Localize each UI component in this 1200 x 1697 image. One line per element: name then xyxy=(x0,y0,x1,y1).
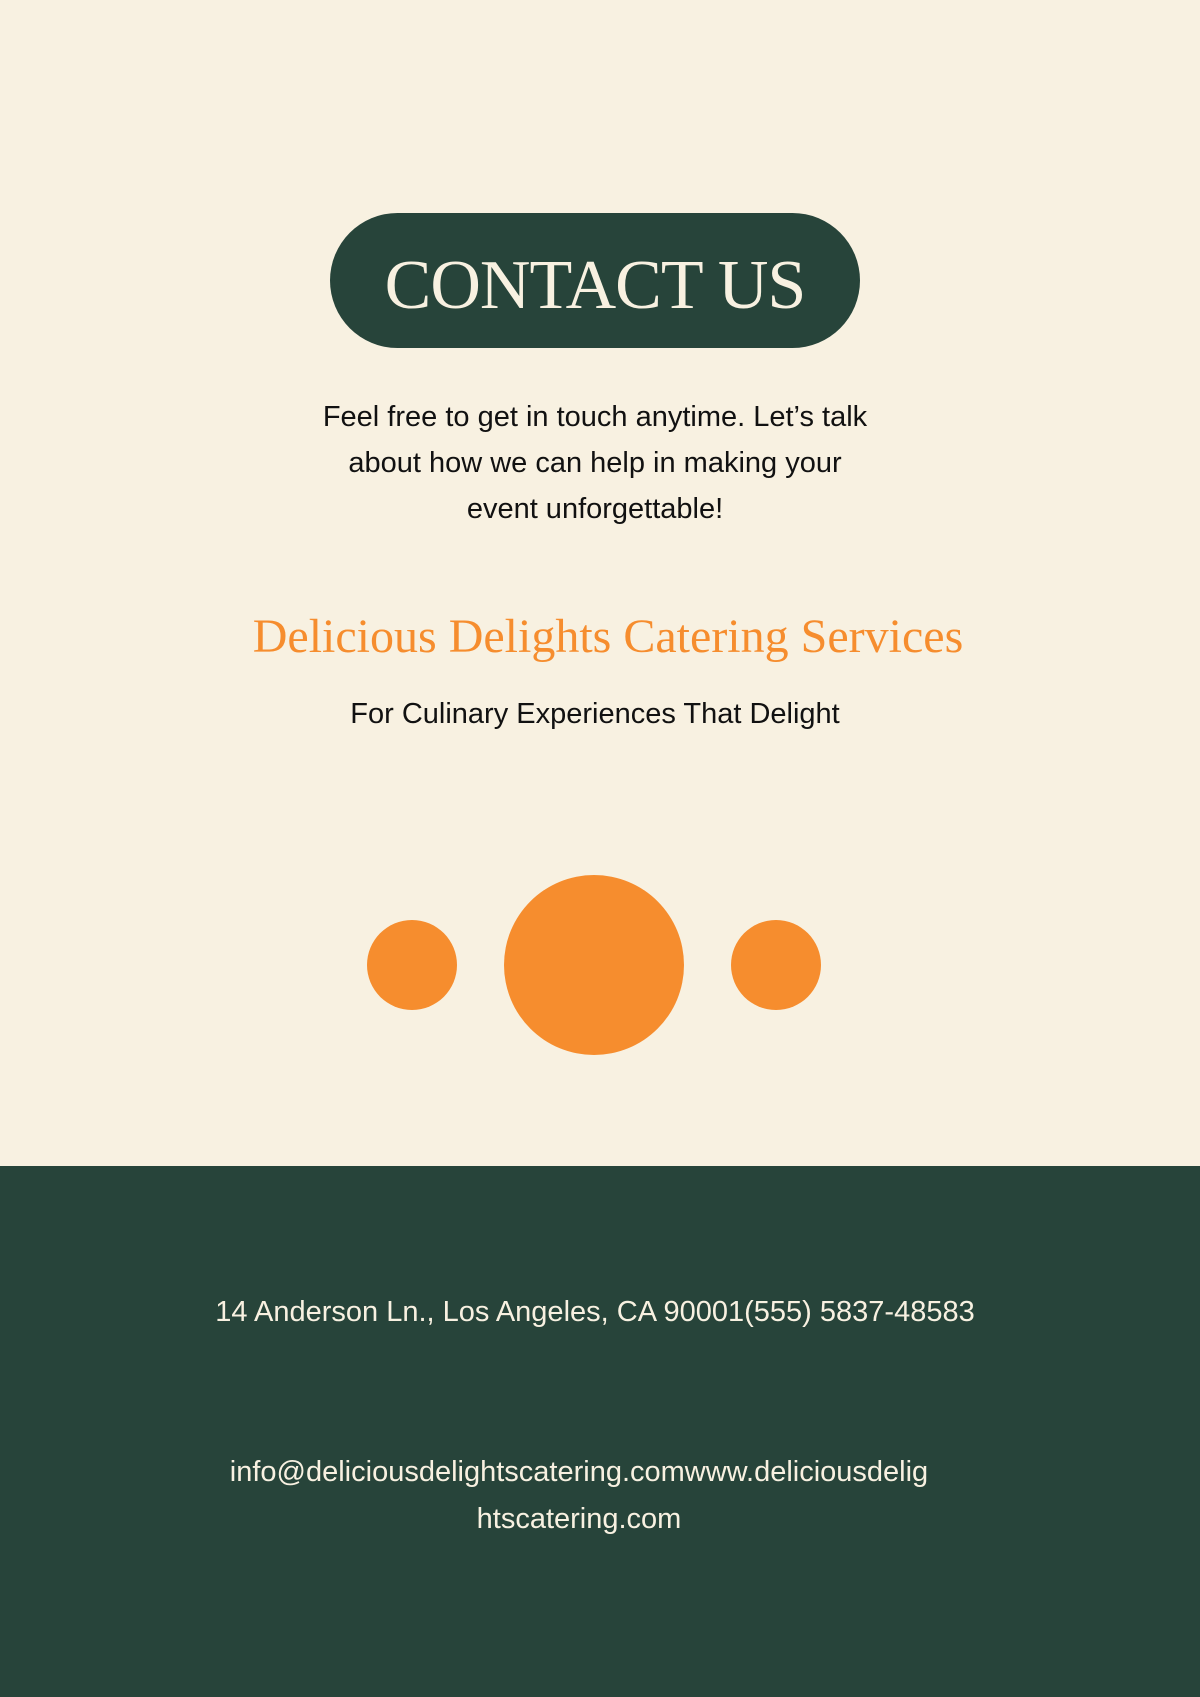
intro text: event unforgettable! xyxy=(467,493,723,525)
address and phone: 14 Anderson Ln., Los Angeles, CA 90001(555) 5837-48583 xyxy=(215,1296,975,1328)
email and website xyxy=(230,1456,928,1535)
intro text xyxy=(323,401,868,525)
tagline: For Culinary Experiences That Delight xyxy=(350,698,840,730)
large center circle xyxy=(504,875,684,1055)
small left circle xyxy=(367,920,457,1010)
footer band xyxy=(0,1166,1200,1697)
brand name heading: Delicious Delights Catering Services xyxy=(253,610,963,663)
intro text: about how we can help in making your xyxy=(348,447,842,479)
title pill: CONTACT US: CONTACT US xyxy=(385,247,805,324)
title pill: CONTACT US xyxy=(330,213,860,348)
small right circle xyxy=(731,920,821,1010)
decorative circles xyxy=(367,875,821,1055)
intro text: Feel free to get in touch anytime. Let’s talk xyxy=(323,401,867,433)
email and website: info@deliciousdelightscatering.comwww.deliciousdelig xyxy=(230,1456,928,1488)
email and website: htscatering.com xyxy=(477,1503,681,1535)
